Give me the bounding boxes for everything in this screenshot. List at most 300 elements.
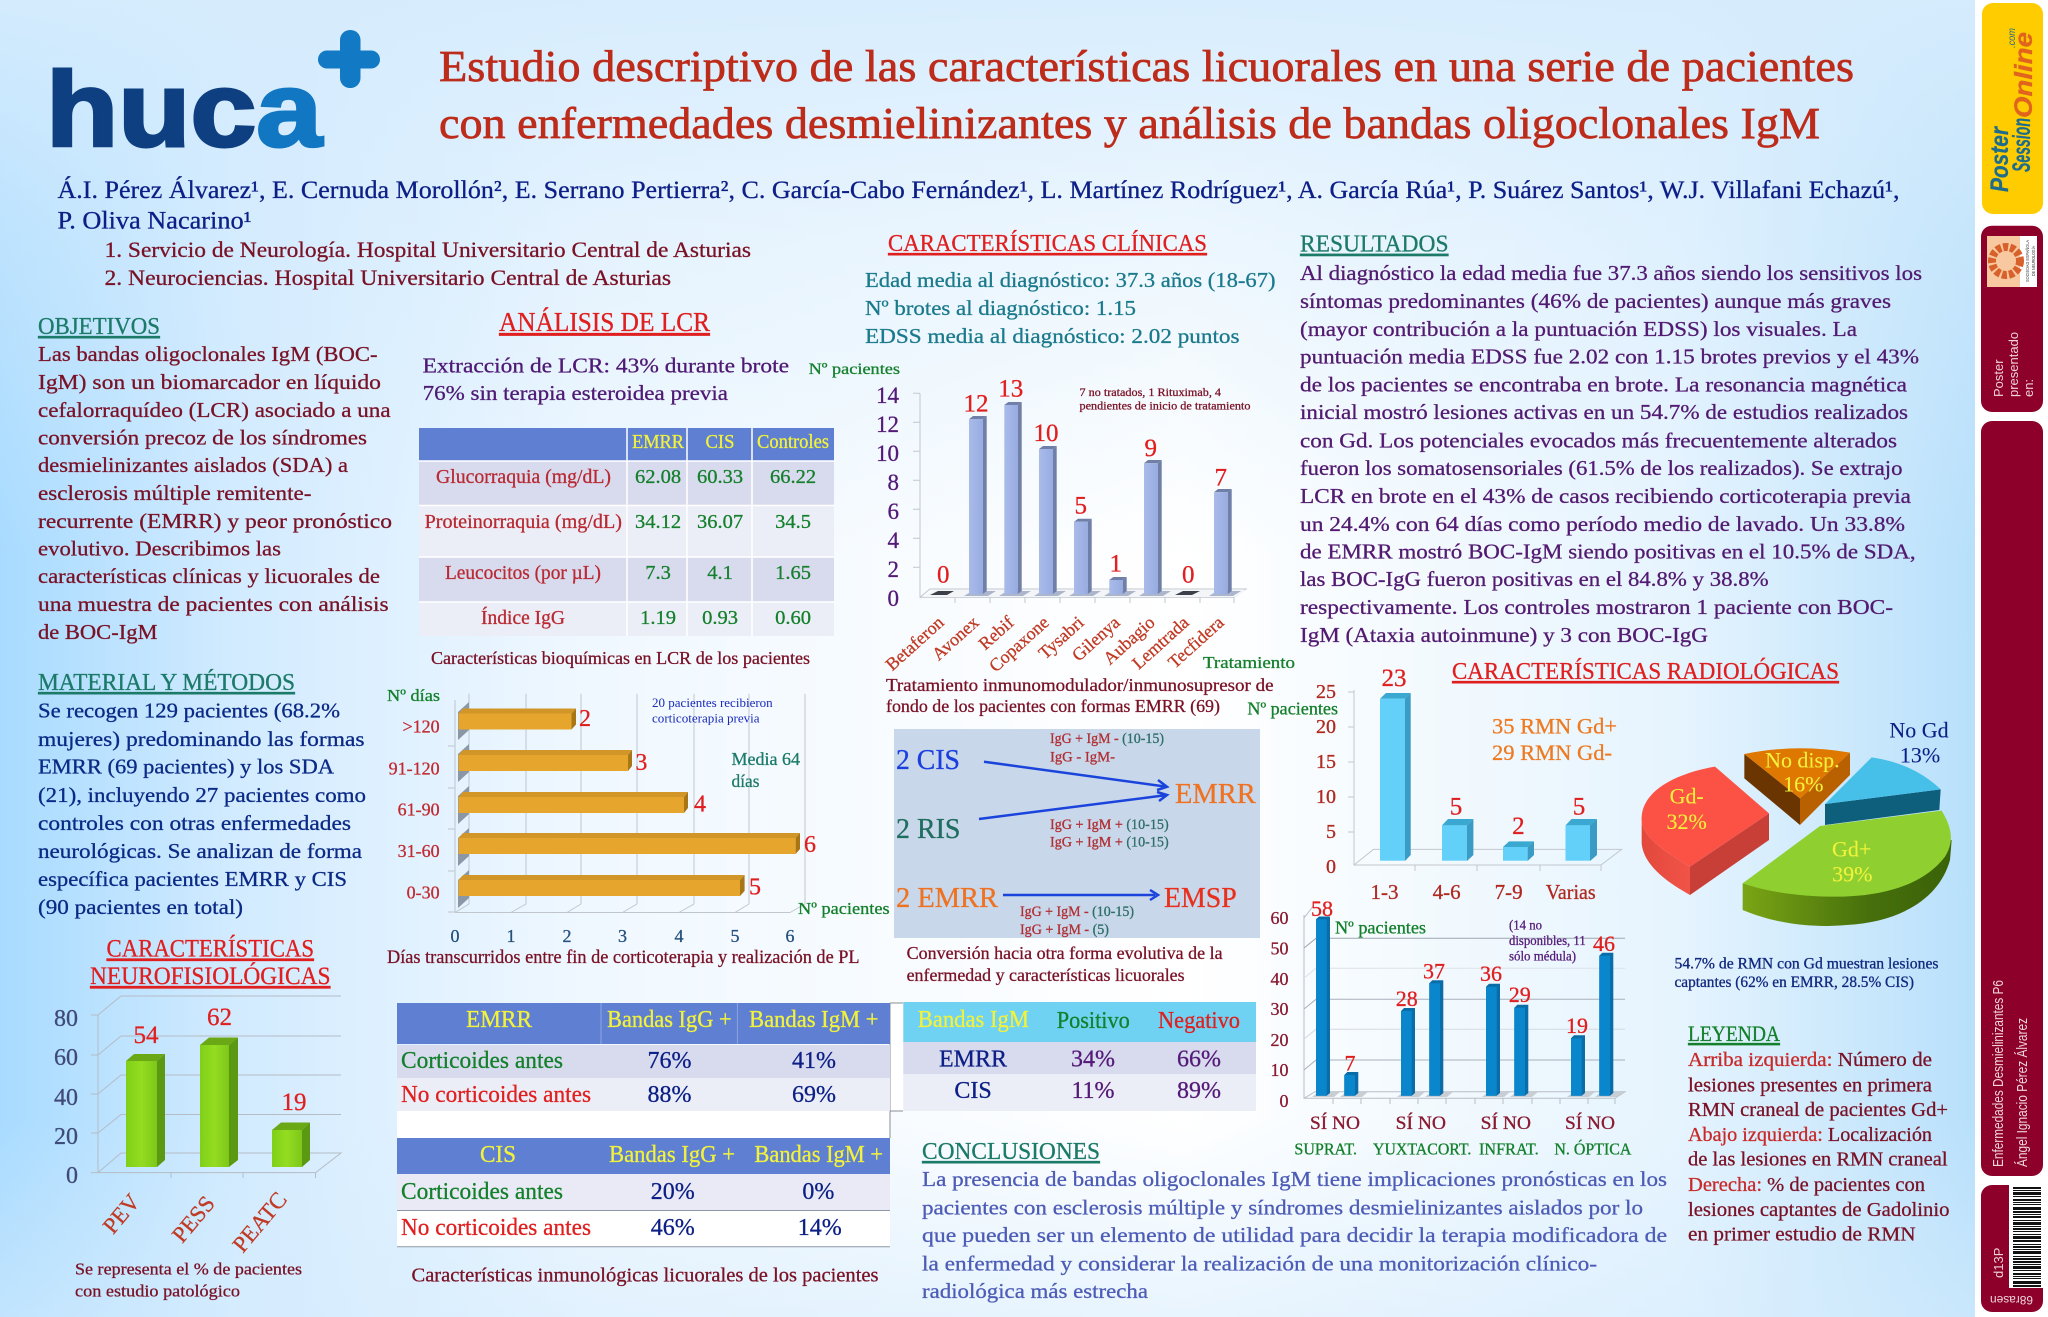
bar chart: tratamiento: 0 — [937, 562, 950, 589]
table: bioquímica LCR: EMRR — [632, 431, 685, 453]
table: CIS inmunología: Bandas IgG + — [609, 1142, 735, 1168]
sidebar: PosterSessionOnline badge — [1982, 3, 2043, 214]
caption: conversión — [907, 943, 1223, 985]
bar: 61-90 — [458, 792, 688, 813]
caption: bioquímica LCR: Características bioquímicas en LCR de los pacientes — [431, 648, 810, 668]
bar chart: número de lesiones: 10 — [1316, 786, 1336, 808]
table: bioquímica LCR: 36.07 — [697, 511, 743, 533]
table: bioquímica LCR: Índice IgG — [481, 606, 565, 629]
note: media 64 días: Media 64 — [732, 749, 800, 769]
bar chart: localización de lesiones: SÍ NO — [1396, 1112, 1446, 1134]
bar chart: localización de lesiones: SÍ NO — [1481, 1112, 1531, 1134]
text block: resultados: las BOC-IgG fueron positivas en el 84.8% y 38.8% — [1300, 567, 1769, 591]
caption: RMN con Gd: 54.7% de RMN con Gd muestran lesiones — [1674, 956, 1938, 972]
bar chart: días desde corticoterapia: 2 — [579, 706, 591, 732]
bar chart: tratamiento: 10 — [1034, 420, 1058, 447]
bar chart: número de lesiones: 2 — [1512, 813, 1525, 840]
authors: Á.I. Pérez Álvarez¹, E. Cernuda Morollón², E. Serrano Pertierra², C. García-Cabo Fernández¹, L. Martínez Rodríguez¹, A. García Rúa¹, P. Suárez Santos¹, W.J. Villafani Echazú¹, — [58, 176, 1900, 204]
bar chart: días desde corticoterapia: 31-60 — [398, 841, 440, 861]
text block: leyenda: lesiones presentes en primera — [1688, 1074, 1932, 1096]
text block: leyenda: lesiones captantes de Gadolinio — [1688, 1199, 1950, 1221]
bar: 4-6 — [1442, 819, 1473, 861]
bar: PEV — [126, 1054, 165, 1167]
table: bioquímica LCR: 34.12 — [635, 511, 681, 533]
bar chart: localización de lesiones: N. ÓPTICA — [1554, 1140, 1631, 1158]
pie chart: captación de gadolinio: 13% — [1900, 743, 1940, 768]
pie chart: captación de gadolinio: 16% — [1783, 772, 1823, 797]
slice: No disp. — [1744, 748, 1850, 825]
bar: 31-60 — [458, 833, 800, 854]
text block: resultados: un 24.4% con 64 días como período medio de lavado. Un 33.8% — [1300, 512, 1905, 536]
bar chart: tratamiento — [809, 361, 1295, 676]
text block: características clínicas: Edad media al diagnóstico: 37.3 años (18-67) — [865, 268, 1276, 292]
bar chart: localización de lesiones: 50 — [1270, 939, 1288, 959]
note: corticoterapia: corticoterapia previa — [652, 711, 760, 726]
bar chart: localización de lesiones: 19 — [1566, 1013, 1588, 1038]
text block: resultados: de los pacientes se encontraba en brote. La resonancia magnética — [1300, 372, 1907, 396]
heading: características neurofisiológicas: CARACTERÍSTICAS — [106, 934, 314, 962]
right white strip — [1975, 0, 2048, 1317]
table: bioquímica LCR: CIS — [706, 431, 734, 453]
note: no disponibles: sólo médula) — [1509, 948, 1576, 964]
bars: localización — [1312, 916, 1623, 1097]
bar: >120 — [458, 708, 576, 730]
caption: días transcurridos: Días transcurridos entre fin de corticoterapia y realización de PL — [387, 948, 860, 968]
bar chart: neurofisiología: PEATC — [227, 1187, 292, 1257]
bar: varias — [1566, 819, 1597, 861]
bar chart: días desde corticoterapia: 2 — [562, 926, 572, 946]
text block: resultados: respectivamente. Los controles mostraron 1 paciente con BOC- — [1300, 595, 1893, 619]
text block: extracción de LCR: Extracción de LCR: 43% durante brote — [423, 354, 789, 378]
text block: objetivos: Las bandas oligoclonales IgM (BOC- — [38, 342, 378, 366]
table: bioquímica LCR — [419, 428, 834, 636]
bar chart: días desde corticoterapia: 0-30 — [407, 883, 440, 903]
bar chart: tratamiento: 0 — [888, 586, 899, 611]
text block: extracción de LCR — [423, 354, 789, 405]
table: bioquímica LCR: Glucorraquia (mg/dL) — [436, 466, 611, 488]
logo: huca: huca — [46, 51, 323, 169]
bar chart: tratamiento: 6 — [888, 499, 899, 524]
bar chart: localización de lesiones: 0 — [1280, 1091, 1288, 1111]
bar chart: tratamiento: 12 — [964, 391, 988, 418]
table: CIS inmunología — [397, 1138, 890, 1247]
bar chart: localización de lesiones — [1270, 896, 1631, 1158]
bar chart: localización de lesiones: Nº pacientes — [1335, 918, 1426, 938]
caption: neurofisiología — [75, 1260, 302, 1300]
bar chart: localización de lesiones: 46 — [1593, 931, 1615, 956]
heading: resultados: RESULTADOS — [1300, 232, 1448, 258]
bar chart: tratamiento: Tecfidera — [1164, 612, 1228, 672]
bar chart: días desde corticoterapia: 6 — [804, 832, 816, 858]
caption: tratamiento: Tratamiento inmunomodulador/inmunosupresor de — [886, 675, 1274, 695]
bar chart: neurofisiología: 40 — [54, 1085, 78, 1111]
sidebar: PosterSessionOnline badge: .com — [2007, 28, 2018, 48]
note: no disponibles — [1509, 917, 1586, 964]
text block: características clínicas: EDSS media al diagnóstico: 2.02 puntos — [865, 324, 1240, 348]
text block: características clínicas — [865, 268, 1276, 348]
caption: conversión: enfermedad y características licuorales — [907, 965, 1185, 985]
table: CIS inmunología: Bandas IgM + — [754, 1142, 883, 1168]
note: corticoterapia: 20 pacientes recibieron — [652, 695, 773, 710]
sidebar: session panel: Ángel Ignacio Pérez Álvarez — [2014, 1018, 2031, 1167]
text block: leyenda: en primer estudio de RMN — [1688, 1224, 1916, 1246]
text block: objetivos: evolutivo. Describimos las — [38, 536, 281, 560]
text block: resultados: de EMRR mostró BOC-IgM siendo positivas en el 10.5% de SDA, — [1300, 540, 1916, 564]
table: bioquímica LCR: Controles — [757, 431, 829, 453]
sidebar: presented at panel: presentado — [2006, 332, 2021, 397]
diagram: conversión: IgG + IgM - (10-15) — [1050, 731, 1164, 747]
table: EMRR inmunología: Bandas IgM + — [749, 1007, 878, 1033]
bar chart: número de lesiones: 5 — [1326, 821, 1336, 843]
bar chart: número de lesiones — [1247, 665, 1622, 904]
caption: neurofisiología: con estudio patológico — [75, 1281, 240, 1300]
table: bioquímica LCR: 62.08 — [635, 466, 681, 488]
text block: RMN Gd — [1492, 714, 1617, 765]
text block: objetivos: recurrente (EMRR) y peor pronóstico — [38, 509, 392, 533]
affiliations: 2. Neurociencias. Hospital Universitario Central de Asturias — [104, 265, 671, 290]
bar chart: neurofisiología: 19 — [282, 1089, 306, 1116]
text block: leyenda: Abajo izquierda: Localización — [1688, 1124, 1932, 1146]
sidebar: presented at panel: en: — [2021, 379, 2036, 397]
note: media 64 días: días — [732, 771, 760, 791]
table: bioquímica LCR: 0.93 — [702, 607, 738, 629]
text block: características clínicas: Nº brotes al diagnóstico: 1.15 — [865, 296, 1136, 320]
diagram: conversión: IgG + IgM + (10-15) — [1050, 817, 1169, 833]
bar chart: número de lesiones: 25 — [1316, 681, 1336, 703]
bar chart: localización de lesiones: SÍ NO — [1565, 1112, 1615, 1134]
text block: material y métodos: Se recogen 129 pacientes (68.2% — [38, 699, 340, 723]
title: con enfermedades desmielinizantes y análisis de bandas oligoclonales IgM — [439, 99, 1820, 148]
heading: leyenda: LEYENDA — [1688, 1021, 1780, 1046]
table: bandas IgM — [903, 1002, 1256, 1111]
bar chart: tratamiento: 4 — [888, 528, 900, 553]
text block: material y métodos: mujeres) predominando las formas — [38, 727, 364, 751]
text block: leyenda: RMN craneal de pacientes Gd+ — [1688, 1099, 1948, 1121]
diagram: conversión: IgG + IgM + (10-15) — [1050, 835, 1169, 851]
caption: características inmunológicas: Características inmunológicas licuorales de los pacientes — [412, 1265, 879, 1287]
text block: objetivos: IgM) son un biomarcador en líquido — [38, 370, 381, 394]
bar chart: tratamiento: Tysabri — [1034, 612, 1088, 663]
sidebar: barcode panel — [1981, 1185, 2043, 1312]
note: no tratados: pendientes de inicio de tratamiento — [1080, 398, 1250, 412]
bar chart: días desde corticoterapia: 6 — [786, 926, 794, 946]
bar chart: número de lesiones: 5 — [1573, 794, 1585, 820]
table: bioquímica LCR: 66.22 — [770, 466, 816, 488]
text block: objetivos: desmielinizantes aislados (SDA) a — [38, 453, 348, 477]
table: EMRR inmunología: No corticoides antes — [401, 1082, 591, 1108]
diagram: conversión: 2 CIS — [896, 744, 960, 776]
caption: RMN con Gd: captantes (62% en EMRR, 28.5% CIS) — [1674, 974, 1914, 991]
heading: objetivos: OBJETIVOS — [38, 314, 160, 340]
table: CIS inmunología: No corticoides antes — [401, 1215, 591, 1241]
bar chart: localización de lesiones: SUPRAT. — [1294, 1140, 1357, 1158]
sidebar: session panel: Enfermedades Desmielinizantes P6 — [1991, 980, 2007, 1167]
text block: conclusiones: que pueden ser un elemento de utilidad para decidir la terapia modificadora de — [922, 1223, 1667, 1247]
table: CIS inmunología: CIS — [480, 1142, 516, 1168]
panel: material y métodos — [38, 670, 366, 919]
table: bioquímica LCR: 4.1 — [707, 562, 733, 584]
text block: conclusiones: La presencia de bandas oligoclonales IgM tiene implicaciones pronósticas en los — [922, 1167, 1667, 1191]
note: no disponibles: disponibles, 11 — [1509, 933, 1586, 948]
bar chart: días desde corticoterapia: 3 — [635, 750, 647, 776]
bar chart: localización de lesiones: 29 — [1509, 982, 1531, 1007]
pie chart: captación de gadolinio: 32% — [1667, 809, 1707, 834]
bar chart: neurofisiología — [54, 996, 341, 1257]
bar: 91-120 — [458, 750, 632, 771]
bar chart: días desde corticoterapia: 3 — [618, 926, 627, 946]
white separators between tables — [397, 1003, 903, 1138]
bar chart: localización de lesiones: 28 — [1396, 986, 1418, 1011]
bar chart: tratamiento: 13 — [998, 376, 1023, 403]
note: no tratados: 7 no tratados, 1 Rituximab, 4 — [1080, 385, 1221, 399]
bar chart: localización de lesiones: 37 — [1423, 959, 1445, 984]
bar chart: localización de lesiones: SÍ NO — [1310, 1112, 1360, 1134]
bar chart: días desde corticoterapia: 5 — [749, 874, 761, 900]
slice: No Gd — [1825, 757, 1941, 825]
bar: PEATC — [272, 1122, 310, 1167]
text block: objetivos: cefalorraquídeo (LCR) asociado a una — [38, 398, 391, 422]
arrow: CIS a EMRR — [984, 762, 1167, 790]
table: bioquímica LCR: 1.19 — [640, 607, 676, 629]
panel: leyenda — [1688, 1021, 1950, 1246]
text block: resultados: (mayor contribución a la puntuación EDSS) los visuales. La — [1300, 317, 1857, 341]
table: bioquímica LCR: Leucocitos (por µL) — [445, 562, 601, 584]
bars: tratamientos — [964, 402, 1241, 596]
caption: neurofisiología: Se representa el % de pacientes — [75, 1260, 302, 1278]
table: bandas IgM: 66% — [1177, 1046, 1221, 1072]
bar chart: número de lesiones: 5 — [1450, 794, 1462, 820]
sidebar: barcode panel: 68rasen — [1990, 1293, 2033, 1307]
table: bandas IgM: 11% — [1071, 1078, 1115, 1104]
text block: leyenda: de las lesiones en RMN craneal — [1688, 1149, 1948, 1171]
diagram: conversión: 2 RIS — [896, 813, 960, 845]
diagram: conversión — [894, 729, 1260, 938]
table: CIS inmunología: 20% — [651, 1179, 695, 1205]
bar chart: tratamiento: Avonex — [928, 612, 983, 664]
bar chart: días desde corticoterapia: 1 — [506, 926, 516, 946]
text block: extracción de LCR: 76% sin terapia esteroidea previa — [423, 381, 728, 405]
arrow: EMRR a EMSP — [1003, 890, 1158, 900]
bar chart: días desde corticoterapia: 5 — [730, 926, 740, 946]
caption: tratamiento — [886, 675, 1274, 717]
bar: 1-3 — [1380, 693, 1411, 861]
table: bioquímica LCR: 0.60 — [775, 607, 811, 629]
diagram: conversión: EMSP — [1164, 882, 1237, 914]
bar chart: días desde corticoterapia: >120 — [402, 716, 440, 736]
bar chart: días desde corticoterapia: 4 — [694, 792, 706, 818]
bar chart: tratamiento: 12 — [876, 412, 899, 437]
text block: RMN Gd: 29 RMN Gd- — [1492, 740, 1612, 765]
bar chart: neurofisiología: PEV — [98, 1189, 145, 1239]
title — [439, 42, 1854, 148]
text block: objetivos: esclerosis múltiple remitente- — [38, 481, 312, 505]
text block: resultados: IgM (Ataxia autoinmune) y 3 con BOC-IgG — [1300, 623, 1708, 647]
bar chart: localización de lesiones: 60 — [1270, 908, 1288, 928]
text block: resultados: Al diagnóstico la edad media fue 37.3 años siendo los sensitivos los — [1300, 261, 1922, 285]
panel: resultados — [1300, 232, 1922, 647]
bar chart: localización de lesiones: INFRAT. — [1479, 1140, 1539, 1158]
table: bandas IgM: 34% — [1071, 1046, 1115, 1072]
bar chart: tratamiento: Betaferon — [882, 612, 948, 674]
sidebar: PosterSessionOnline badge: Poster — [1986, 126, 2014, 192]
text block: resultados: con Gd. Los potenciales evocados más frecuentemente alterados — [1300, 428, 1897, 452]
table: bandas IgM: 89% — [1177, 1078, 1221, 1104]
bar chart: días desde corticoterapia: 61-90 — [398, 800, 440, 820]
pie chart: captación de gadolinio: 39% — [1832, 862, 1872, 887]
bar chart: días desde corticoterapia — [387, 686, 890, 946]
pie chart: captación de gadolinio: Gd+ — [1832, 837, 1871, 862]
text block: objetivos: características clínicas y licuorales de — [38, 564, 380, 588]
bar chart: tratamiento: Tratamiento — [1203, 653, 1295, 672]
table: EMRR inmunología: 76% — [648, 1048, 692, 1074]
sidebar: PosterSessionOnline badge: Session — [2008, 118, 2036, 172]
bar chart: tratamiento: Copaxone — [985, 612, 1053, 676]
table: EMRR inmunología: Corticoides antes — [401, 1048, 563, 1074]
bar chart: tratamiento: 0 — [1182, 562, 1195, 589]
heading: características neurofisiológicas — [90, 934, 330, 990]
text block: objetivos: de BOC-IgM — [38, 620, 158, 644]
table: EMRR inmunología: 69% — [792, 1082, 836, 1108]
text block: conclusiones: la enfermedad y considerar la realización de una monitorización clínico- — [922, 1251, 1597, 1275]
bar chart: neurofisiología: 60 — [54, 1045, 78, 1071]
bar chart: días desde corticoterapia: 91-120 — [389, 758, 440, 778]
table: CIS inmunología: 46% — [651, 1215, 695, 1241]
bar chart: número de lesiones: Varias — [1546, 880, 1596, 904]
heading: conclusiones: CONCLUSIONES — [922, 1139, 1100, 1165]
bar chart: localización de lesiones: 36 — [1480, 961, 1502, 986]
table: bioquímica LCR: 60.33 — [697, 466, 743, 488]
bar chart: número de lesiones: 0 — [1326, 856, 1336, 878]
table: bioquímica LCR: Proteinorraquia (mg/dL) — [425, 511, 622, 533]
text block: conclusiones: radiológica más estrecha — [922, 1279, 1148, 1303]
sidebar: presented at panel: Poster — [1991, 359, 2006, 397]
icon: society logo: DE NEUROLOGÍA — [2030, 246, 2036, 276]
text block: resultados: fueron los somatosensoriales (61.5% de los realizados). Se extrajo — [1300, 456, 1902, 480]
sidebar: PosterSessionOnline badge: Online — [2010, 32, 2038, 118]
caption: RMN con Gd — [1674, 956, 1938, 991]
bar: 0-30 — [458, 875, 745, 896]
text block: objetivos — [38, 342, 392, 644]
note: media 64 días — [732, 749, 800, 791]
bar chart: localización de lesiones: 58 — [1311, 896, 1333, 921]
bar chart: tratamiento: 9 — [1144, 435, 1157, 462]
icon: society logo — [1987, 236, 2037, 287]
text block: leyenda: Derecha: % de pacientes con — [1688, 1174, 1925, 1196]
text block: material y métodos: específica pacientes EMRR y CIS — [38, 867, 347, 891]
diagram: conversión: IgG - IgM- — [1050, 750, 1115, 766]
bar chart: tratamiento: 2 — [888, 557, 899, 582]
table: bandas IgM: Negativo — [1158, 1008, 1240, 1034]
bar chart: número de lesiones: 20 — [1316, 716, 1336, 738]
text block: resultados: puntuación media EDSS fue 2.02 con 1.15 brotes previos y el 43% — [1300, 345, 1919, 369]
bar chart: número de lesiones: 23 — [1382, 665, 1406, 692]
table: bioquímica LCR: 7.3 — [645, 562, 671, 584]
panel: objetivos — [38, 314, 392, 644]
caption: conversión: Conversión hacia otra forma evolutiva de la — [907, 943, 1223, 963]
bar chart: neurofisiología: 80 — [54, 1006, 78, 1032]
sidebar: presented at panel — [1981, 226, 2043, 412]
title: Estudio descriptivo de las características licuorales en una serie de pacientes — [439, 42, 1854, 91]
text block: conclusiones: pacientes con esclerosis múltiple y síndromes desmielinizantes aislados por lo — [922, 1195, 1643, 1219]
affiliations: 1. Servicio de Neurología. Hospital Universitario Central de Asturias — [104, 237, 751, 262]
panel: conclusiones — [922, 1139, 1667, 1303]
bar chart: localización de lesiones: 20 — [1270, 1030, 1288, 1050]
bar chart: neurofisiología: 62 — [207, 1004, 232, 1031]
diagram: conversión: IgG + IgM - (10-15) — [1020, 904, 1134, 920]
bar chart: días desde corticoterapia: Nº días — [387, 686, 440, 705]
bar chart: tratamiento: Rebif — [975, 612, 1018, 654]
bar: PESS — [200, 1038, 238, 1167]
text block: objetivos: una muestra de pacientes con análisis — [38, 592, 389, 616]
bar: 7-9 — [1503, 841, 1534, 861]
heading: características radiológicas: CARACTERÍSTICAS RADIOLÓGICAS — [1452, 658, 1839, 685]
bar chart: localización de lesiones: YUXTACORT. — [1373, 1140, 1471, 1158]
text block: material y métodos — [38, 699, 366, 919]
bar chart: tratamiento: 5 — [1074, 492, 1087, 519]
logo: huca — [46, 30, 380, 169]
diagram: conversión: IgG + IgM - (5) — [1020, 922, 1109, 938]
heading: características clínicas: CARACTERÍSTICAS CLÍNICAS — [888, 231, 1207, 257]
text block: objetivos: conversión precoz de los síndromes — [38, 426, 367, 450]
heading: características neurofisiológicas: NEUROFISIOLÓGICAS — [90, 962, 330, 990]
diagram: conversión: 2 EMRR — [896, 882, 999, 914]
diagram: conversión: EMRR — [1175, 778, 1256, 810]
table: bandas IgM: Bandas IgM — [918, 1007, 1029, 1033]
note: no tratados — [1080, 385, 1250, 412]
bar chart: tratamiento: Nº pacientes — [809, 361, 900, 378]
text block: RMN Gd: 35 RMN Gd+ — [1492, 714, 1617, 739]
bar chart: tratamiento: 1 — [1109, 551, 1122, 578]
heading: análisis de LCR: ANÁLISIS DE LCR — [499, 307, 710, 337]
table: EMRR inmunología — [397, 1003, 890, 1111]
heading: material y métodos: MATERIAL Y MÉTODOS — [38, 670, 295, 696]
bar chart: número de lesiones: 1-3 — [1370, 880, 1398, 904]
bar chart: neurofisiología: 54 — [134, 1022, 159, 1049]
table: EMRR inmunología: EMRR — [466, 1007, 532, 1033]
pie chart: captación de gadolinio: No Gd — [1889, 717, 1949, 742]
bar chart: número de lesiones: Nº pacientes — [1247, 699, 1338, 719]
text block: material y métodos: neurológicas. Se analizan de forma — [38, 839, 362, 863]
pie chart: captación de gadolinio: Gd- — [1670, 783, 1704, 808]
pie chart: captación de gadolinio: No disp. — [1765, 748, 1840, 773]
text block: resultados — [1300, 261, 1922, 647]
arrow: RIS a EMRR — [979, 792, 1167, 819]
table: bandas IgM: Positivo — [1057, 1008, 1130, 1034]
sidebar: barcode panel: d13P — [1991, 1248, 2006, 1278]
bar chart: días desde corticoterapia: Nº pacientes — [798, 899, 890, 918]
bar chart: tratamiento: 10 — [876, 441, 899, 466]
pie chart: captación de gadolinio — [1642, 717, 1952, 926]
text block: leyenda — [1688, 1049, 1950, 1246]
text block: resultados: LCR en brote en el 43% de casos recibiendo corticoterapia previa — [1300, 484, 1911, 508]
note: no disponibles: (14 no — [1509, 917, 1542, 932]
affiliations — [104, 237, 751, 290]
bar chart: tratamiento: 14 — [876, 383, 900, 408]
table: bioquímica LCR: 34.5 — [775, 511, 811, 533]
slice: Gd- — [1642, 767, 1769, 895]
bar chart: días desde corticoterapia: 0 — [450, 926, 460, 946]
icon: society logo: SOCIEDAD ESPAÑOLA — [2024, 240, 2030, 282]
table: bandas IgM: EMRR — [939, 1046, 1007, 1072]
bar chart: localización de lesiones: 7 — [1344, 1050, 1356, 1075]
table: EMRR inmunología: Bandas IgG + — [607, 1007, 732, 1033]
table: EMRR inmunología: 41% — [792, 1048, 836, 1074]
sidebar: session panel — [1981, 421, 2043, 1176]
table: CIS inmunología: 0% — [802, 1179, 834, 1205]
table: EMRR inmunología: 88% — [648, 1082, 692, 1108]
text block: material y métodos: EMRR (69 pacientes) y los SDA — [38, 755, 334, 779]
bar chart: neurofisiología: PESS — [167, 1191, 220, 1247]
